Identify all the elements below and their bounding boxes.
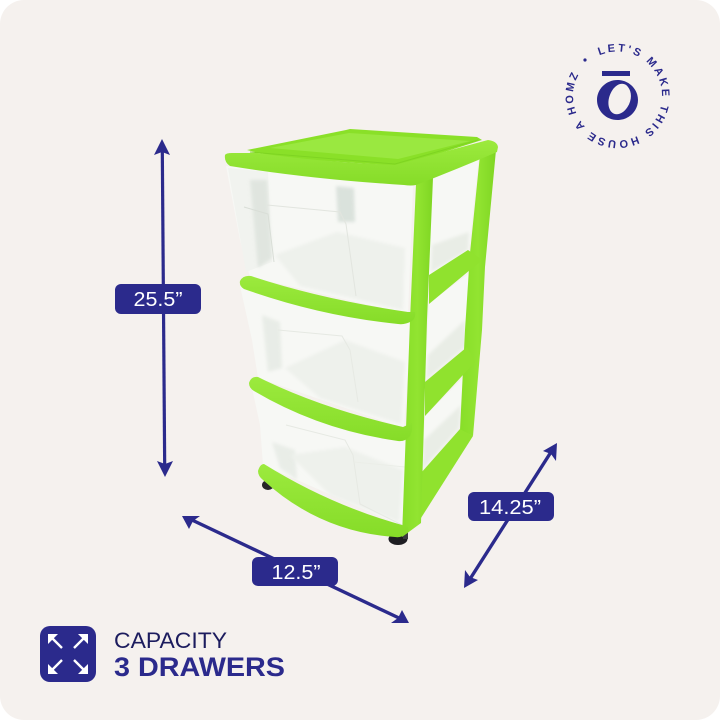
logo ring text: LET'S MAKE THIS HOUSE A HOMZ bbox=[566, 44, 670, 148]
side rails bbox=[421, 250, 482, 518]
drawer 2 body bbox=[240, 286, 411, 428]
drawer 1 handle band bbox=[240, 276, 415, 324]
drawer 2 handle band bbox=[249, 377, 412, 441]
label: height 25.5: 25.5” bbox=[134, 289, 182, 311]
label: height 25.5 bbox=[115, 284, 201, 314]
capacity caption bbox=[114, 628, 285, 682]
icon: capacity expand arrows bbox=[40, 626, 96, 682]
top frame bbox=[225, 140, 498, 186]
wheels bbox=[262, 480, 408, 545]
label: depth 14.25 bbox=[468, 492, 554, 521]
side clear panels bbox=[421, 156, 479, 472]
label: depth 14.25: 14.25” bbox=[479, 497, 541, 519]
label: width 12.5: 12.5” bbox=[272, 562, 320, 584]
height arrow bbox=[154, 139, 173, 477]
width arrow bbox=[182, 516, 409, 623]
capacity value: 3 DRAWERS bbox=[114, 652, 285, 682]
front column bbox=[402, 178, 433, 537]
product: three-drawer cart bbox=[225, 129, 498, 545]
depth arrow bbox=[464, 443, 557, 588]
label: width 12.5 bbox=[252, 557, 338, 586]
drawer 3 handle band bbox=[258, 464, 409, 537]
lid bbox=[247, 129, 482, 166]
drawer 3 body bbox=[252, 388, 408, 526]
drawer 1 body bbox=[226, 166, 413, 314]
logo: let's make this house a homz bbox=[566, 44, 670, 148]
back column bbox=[460, 150, 496, 436]
capacity caption: CAPACITY bbox=[114, 628, 227, 653]
